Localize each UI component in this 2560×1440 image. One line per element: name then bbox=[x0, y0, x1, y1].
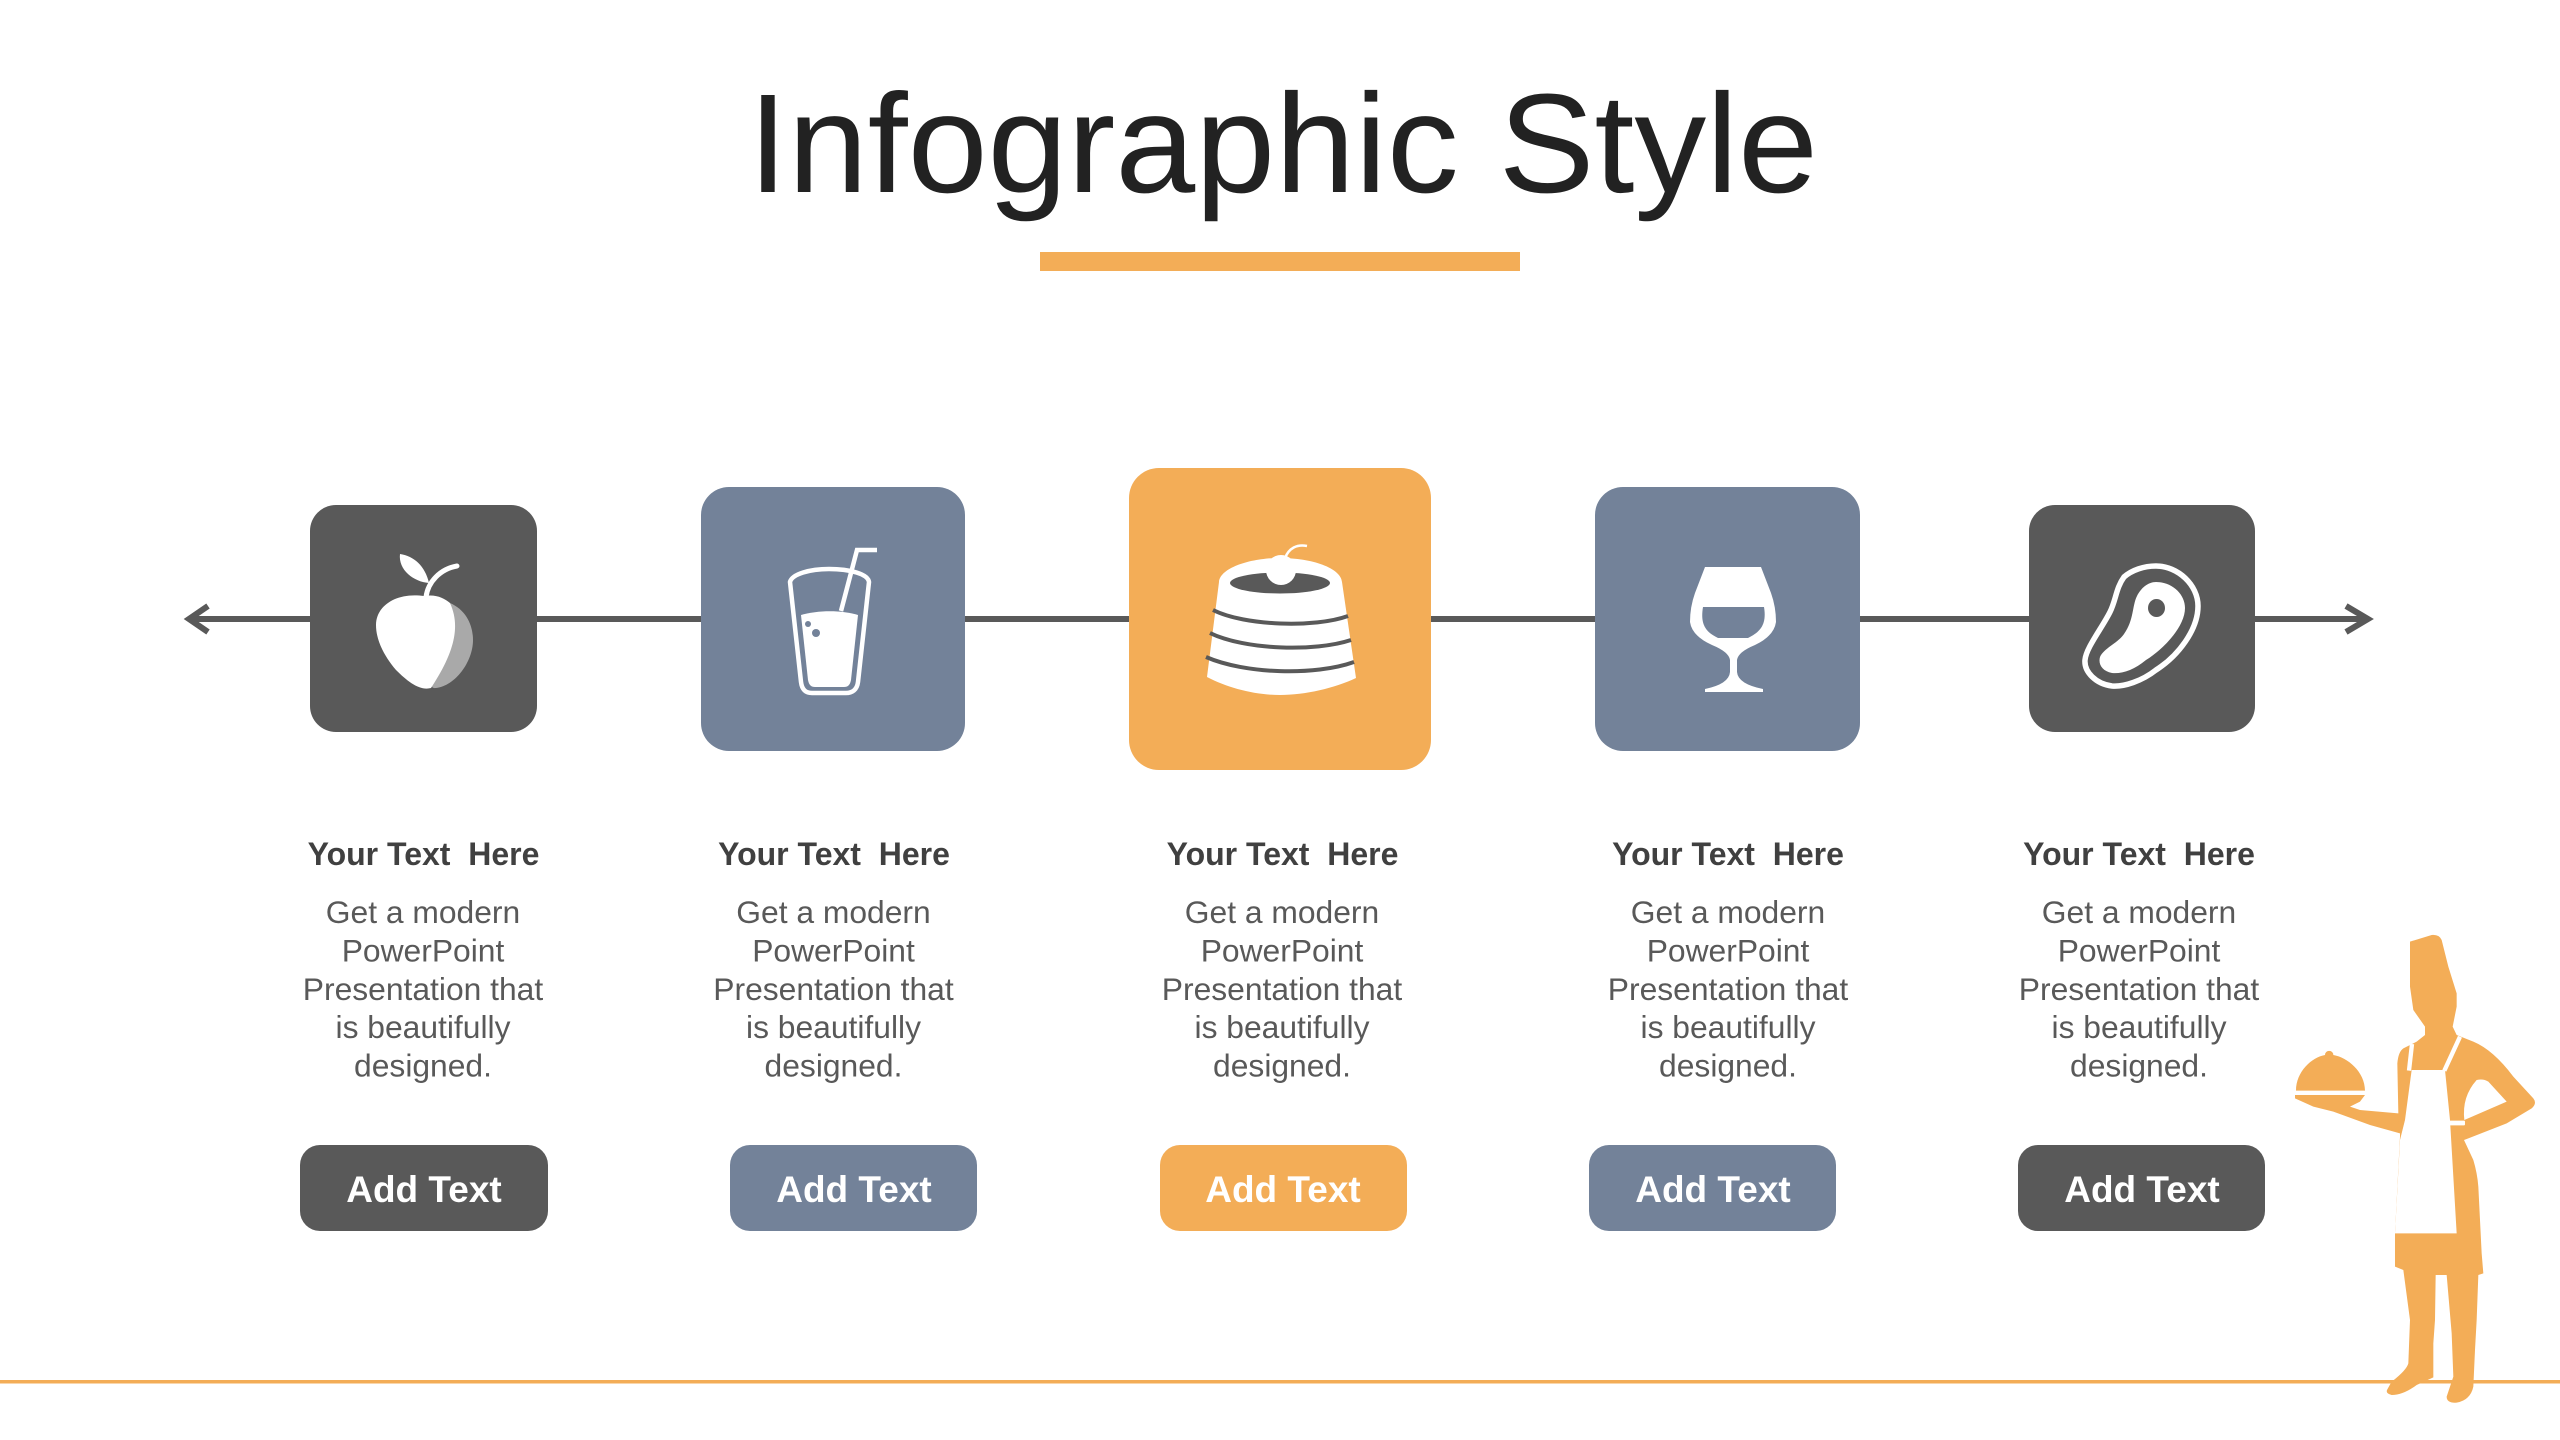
description: Presentation that bbox=[1162, 971, 1402, 1007]
step 2: drink bbox=[701, 487, 977, 1231]
button bbox=[1160, 1145, 1407, 1231]
icon box bbox=[2029, 505, 2255, 732]
description: Presentation that bbox=[713, 971, 954, 1007]
step 1: apple bbox=[300, 505, 548, 1231]
button bbox=[730, 1145, 977, 1231]
step 5: steak bbox=[2018, 505, 2265, 1231]
description: PowerPoint bbox=[752, 932, 915, 968]
button: Add Text bbox=[1635, 1169, 1791, 1210]
button bbox=[1589, 1145, 1836, 1231]
icon box bbox=[1129, 468, 1431, 770]
description: is beautifully bbox=[2052, 1009, 2227, 1045]
button bbox=[2018, 1145, 2265, 1231]
title: Infographic Style bbox=[748, 64, 1818, 222]
button: Add Text bbox=[1205, 1169, 1361, 1210]
heading: Your Text Here bbox=[1612, 836, 1844, 872]
description: PowerPoint bbox=[2058, 932, 2220, 968]
icon box bbox=[310, 505, 537, 732]
description: Presentation that bbox=[1608, 971, 1848, 1007]
description: designed. bbox=[2070, 1048, 2208, 1084]
description: designed. bbox=[354, 1048, 492, 1084]
description: is beautifully bbox=[746, 1009, 921, 1045]
button: Add Text bbox=[2064, 1169, 2220, 1210]
description: designed. bbox=[765, 1048, 902, 1084]
ground line bbox=[0, 1380, 2560, 1384]
icon: steak bbox=[2085, 566, 2198, 686]
heading: Your Text Here bbox=[1167, 836, 1398, 872]
icon box bbox=[701, 487, 965, 751]
icon box bbox=[1595, 487, 1860, 751]
icon: glass with straw bbox=[790, 550, 877, 693]
chef silhouette bbox=[2295, 935, 2535, 1403]
description: Presentation that bbox=[303, 971, 543, 1007]
description: Get a modern bbox=[2042, 894, 2236, 930]
button: Add Text bbox=[346, 1169, 502, 1210]
heading: Your Text Here bbox=[308, 836, 539, 872]
timeline arrow bbox=[189, 606, 2368, 632]
description: designed. bbox=[1213, 1048, 1351, 1084]
description: PowerPoint bbox=[1647, 932, 1809, 968]
description: Presentation that bbox=[2019, 971, 2259, 1007]
description: is beautifully bbox=[1195, 1009, 1370, 1045]
step 4: wine bbox=[1589, 487, 1860, 1231]
description: PowerPoint bbox=[342, 932, 504, 968]
description: designed. bbox=[1659, 1048, 1797, 1084]
description: is beautifully bbox=[336, 1009, 511, 1045]
heading: Your Text Here bbox=[2023, 836, 2255, 872]
title underline bbox=[1040, 252, 1520, 271]
description: Get a modern bbox=[1631, 894, 1825, 930]
description: is beautifully bbox=[1641, 1009, 1816, 1045]
icon: cake bbox=[1206, 546, 1356, 695]
description: Get a modern bbox=[736, 894, 931, 930]
description: Get a modern bbox=[326, 894, 520, 930]
button bbox=[300, 1145, 548, 1231]
description: PowerPoint bbox=[1201, 932, 1363, 968]
icon: apple bbox=[376, 554, 473, 689]
description: Get a modern bbox=[1185, 894, 1379, 930]
button: Add Text bbox=[776, 1169, 932, 1210]
icon: wine glass bbox=[1690, 567, 1776, 692]
heading: Your Text Here bbox=[718, 836, 950, 872]
step 3: cake bbox=[1129, 468, 1431, 1231]
